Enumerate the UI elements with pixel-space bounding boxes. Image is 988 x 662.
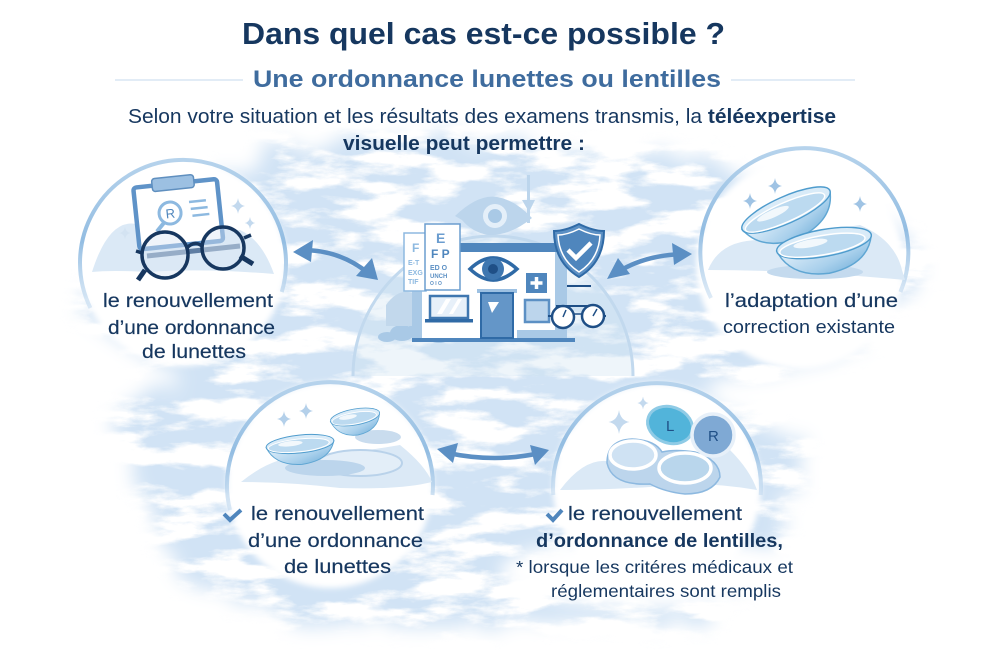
icon: lens case [607, 400, 734, 494]
eye sign [470, 258, 517, 280]
label [723, 290, 898, 337]
faint eye emblem [455, 175, 535, 235]
label: d’une ordonnance [248, 530, 423, 552]
icon: lenses on surface [265, 405, 402, 476]
intro text [128, 106, 836, 155]
icon: glasses [136, 227, 253, 280]
icon: lens case: R [708, 428, 719, 445]
panel: central clinic: O I O [430, 281, 442, 287]
panel: central clinic: ED O [430, 265, 448, 272]
trial frame [548, 286, 606, 328]
panel: central clinic: EXG [408, 270, 423, 277]
label: le renouvellement [251, 503, 425, 525]
label [248, 503, 425, 578]
icon: check [224, 510, 241, 520]
panel: renewal of lenses left [224, 382, 433, 588]
arrow: right to clinic [607, 243, 692, 279]
label [103, 290, 275, 363]
label [516, 503, 793, 601]
panel: adaptation of existing correction [696, 148, 908, 369]
arrow: bottom row [437, 443, 549, 465]
label: * lorsque les critéres médicaux et [516, 557, 793, 577]
icon: check [547, 510, 562, 520]
panel: renewal of lenses right [500, 383, 800, 608]
panel: central clinic: F P [431, 247, 450, 261]
panel: central clinic: E [436, 230, 445, 246]
subtitle with rules: Une ordonnance lunettes ou lentilles [253, 66, 721, 93]
arrow: left to clinic [293, 240, 378, 280]
icon: clipboard [132, 172, 223, 249]
label: d’ordonnance de lentilles, [536, 530, 783, 552]
label: le renouvellement [568, 503, 743, 525]
panel: central clinic: UNCH [430, 274, 447, 280]
icon: lens case: L [666, 418, 674, 435]
panel: renewal of glasses prescription [80, 160, 286, 366]
icon: contact lenses [737, 178, 877, 282]
label: le renouvellement [103, 290, 274, 312]
panel: central clinic: F [412, 241, 419, 255]
panel: central clinic: E-T [408, 260, 420, 267]
panel: central clinic [353, 175, 633, 376]
title: Dans quel cas est-ce possible ? [242, 16, 725, 51]
cross sign [526, 273, 547, 293]
dome [353, 236, 633, 376]
building [422, 250, 567, 338]
intro text: Selon votre situation et les résultats des examens transmis, la téléexpertise [128, 106, 836, 128]
label: l’adaptation d’une [725, 290, 898, 312]
label: réglementaires sont remplis [551, 581, 781, 601]
label: d’une ordonnance [108, 317, 275, 339]
intro text: visuelle peut permettre : [343, 133, 585, 155]
label: de lunettes [142, 341, 246, 363]
rocks and wall [378, 292, 452, 343]
label: de lunettes [284, 556, 391, 578]
shield [554, 224, 604, 277]
panel: central clinic: TIF [408, 279, 419, 286]
background watercolor wash [75, 124, 926, 637]
eye charts [404, 233, 426, 291]
door [477, 289, 517, 293]
windows [430, 296, 468, 318]
icon: clipboard: R [165, 206, 176, 221]
label: correction existante [723, 316, 895, 337]
